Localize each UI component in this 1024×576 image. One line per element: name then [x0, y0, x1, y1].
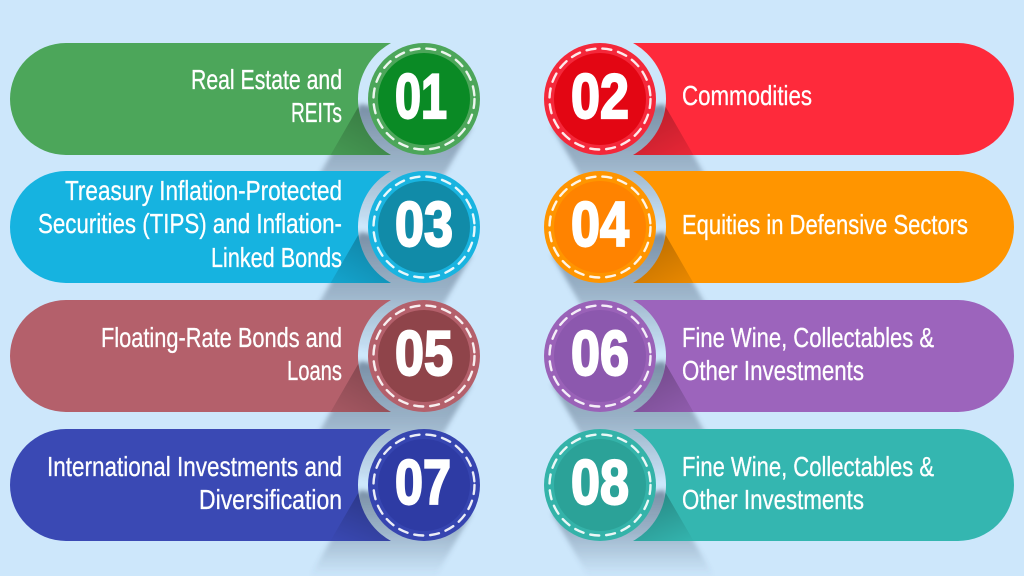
panel: 06 Fine Wine, Collectables and Other Investments [544, 300, 1014, 412]
long shadows cast on the background [300, 104, 724, 576]
badge: 01: 01 [395, 62, 447, 132]
label: 08: Other Investments [682, 484, 864, 515]
panel: 08 Fine Wine, Collectables and Other Investments [544, 429, 1014, 541]
label: 07: International Investments and [47, 451, 342, 482]
label: 05: Floating-Rate Bonds and [101, 322, 342, 353]
badge: 08 [544, 429, 656, 541]
panel: 07 International Investments and Diversification [10, 429, 480, 541]
badge: 02 [544, 43, 656, 155]
panel: 01 Real Estate and REITs [10, 43, 480, 155]
badge: 06 [544, 300, 656, 412]
badge: 06: 06 [571, 319, 629, 389]
label: 08: Fine Wine, Collectables & [682, 451, 934, 482]
badge: 07 [368, 429, 480, 541]
label: 01: REITs [291, 97, 342, 128]
badge: 03: 03 [395, 190, 453, 260]
badge: 07: 07 [395, 448, 451, 518]
badge: 05 [368, 300, 480, 412]
badge: 03 [368, 171, 480, 283]
label: 06: Fine Wine, Collectables & [682, 322, 934, 353]
badge: 01 [368, 43, 480, 155]
label: 03: Treasury Inflation-Protected [65, 175, 342, 206]
badge: 04: 04 [571, 190, 629, 260]
badge: 08: 08 [571, 448, 629, 518]
label: 07: Diversification [199, 484, 342, 515]
label: 03: Securities (TIPS) and Inflation- [38, 208, 342, 239]
panel: 02 Commodities [544, 43, 1014, 155]
panel: 04 Equities in Defensive Sectors [544, 171, 1014, 283]
label: 03: Linked Bonds [211, 242, 342, 273]
label: 02: Commodities [682, 80, 812, 111]
badge: 05: 05 [395, 319, 453, 389]
badge: 04 [544, 171, 656, 283]
label: 06: Other Investments [682, 355, 864, 386]
label: 01: Real Estate and [191, 64, 342, 95]
panel: 03 TIPS and Inflation-Linked Bonds [10, 171, 480, 283]
label: 05: Loans [287, 355, 342, 386]
panel: 05 Floating-Rate Bonds and Loans [10, 300, 480, 412]
badge: 02: 02 [571, 62, 629, 132]
